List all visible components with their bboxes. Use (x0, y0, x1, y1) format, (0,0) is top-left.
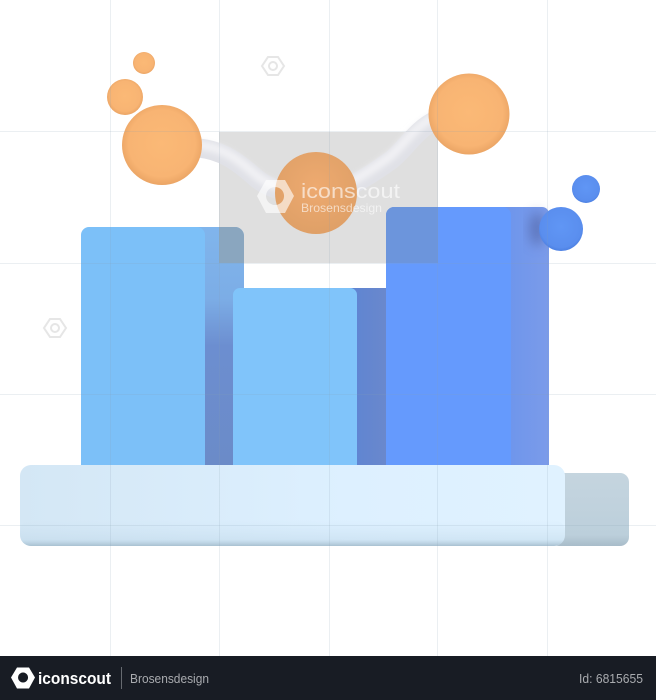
watermark author: Brosensdesign (301, 201, 382, 215)
footer logo (11, 668, 35, 688)
footer id: Id: 6815655 (579, 671, 643, 686)
blue spheres (539, 175, 600, 251)
watermark logo (257, 180, 294, 213)
bar 2 (233, 288, 386, 465)
watermark name: iconscout (301, 180, 400, 203)
bar 1 (81, 227, 244, 465)
footer author: Brosensdesign (130, 671, 209, 686)
small watermark top (262, 57, 284, 75)
center watermark (257, 180, 400, 215)
base platform (20, 465, 629, 546)
watermark grey panel (219, 132, 438, 263)
footer brand: iconscout (38, 669, 111, 688)
trend line (198, 117, 436, 194)
bar 3 (386, 207, 549, 466)
orange spheres (107, 52, 510, 234)
footer bar (0, 656, 656, 700)
small watermark left (44, 319, 66, 337)
